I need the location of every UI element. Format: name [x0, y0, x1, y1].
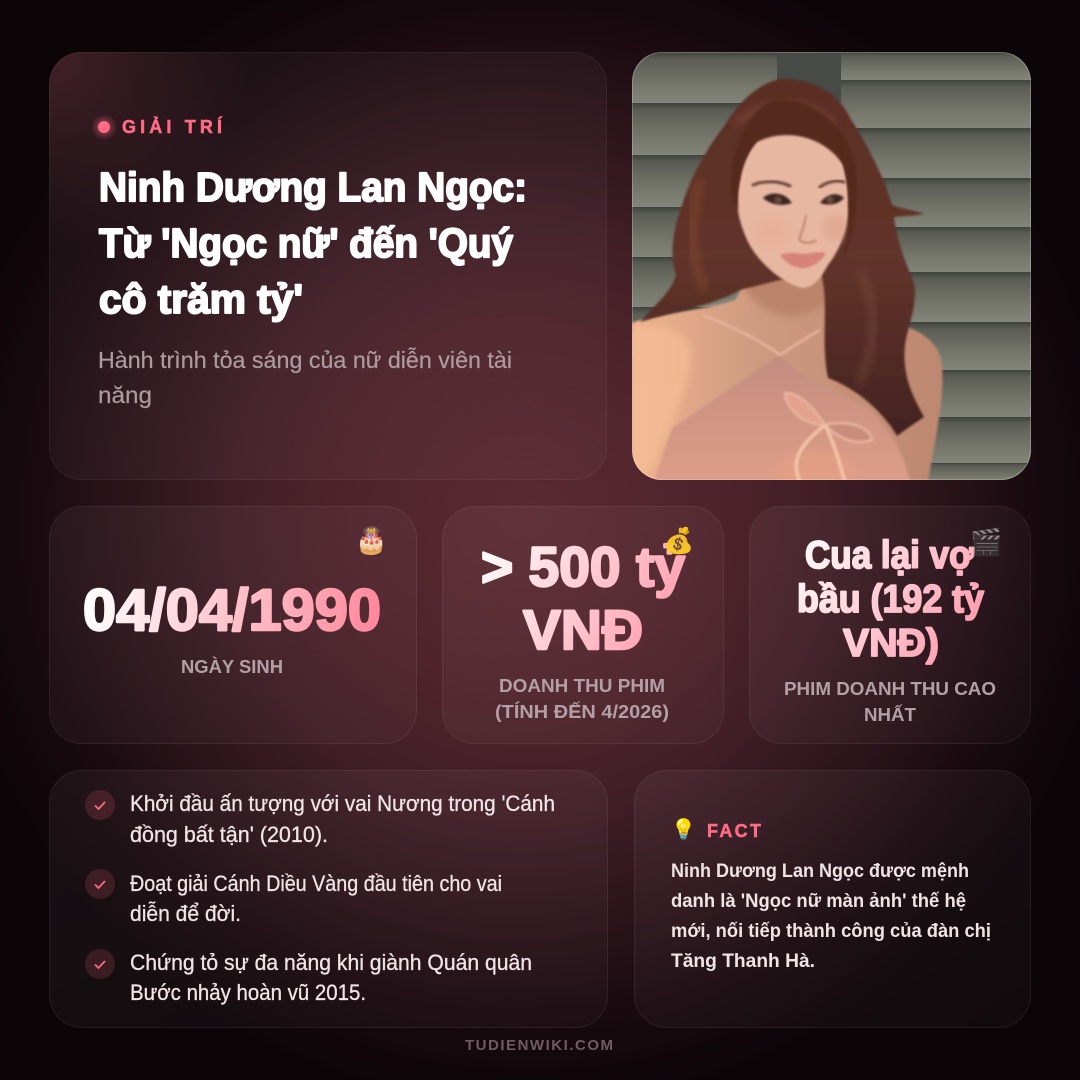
- label: box office: [495, 676, 669, 722]
- icon: light bulb: 💡: [671, 817, 696, 841]
- fact text: Tăng Thanh Hà.: [671, 951, 815, 972]
- list item 3: Chứng tỏ sự đa năng khi giành Quán quân: [130, 950, 532, 975]
- value: box office: > 500 tỷ: [481, 535, 685, 598]
- fact text: mới, nối tiếp thành công của đàn chị: [671, 921, 991, 942]
- fact heading: FACT: [707, 821, 761, 841]
- title: Từ 'Ngọc nữ' đến 'Quý: [99, 220, 513, 266]
- title: cô trăm tỷ': [99, 276, 303, 322]
- panel: fact: [634, 770, 1030, 1028]
- hair back: [640, 79, 924, 436]
- label: top film: NHẤT: [864, 704, 916, 725]
- category tag: GIẢI TRÍ: [122, 116, 223, 137]
- label: birth date: NGÀY SINH: [181, 656, 283, 677]
- panel: portrait photo: [632, 52, 1031, 494]
- panel: top film stat: [750, 506, 1030, 744]
- dress: [654, 355, 910, 482]
- eyes: [763, 194, 844, 205]
- value: box office: [481, 535, 685, 661]
- value: box office: VNĐ: [523, 598, 643, 661]
- hair front over forehead: [731, 99, 857, 262]
- eyebrows: [753, 181, 844, 187]
- list item 1: [85, 790, 555, 847]
- icon: clapperboard: 🎬: [970, 527, 1002, 557]
- fact text: [671, 861, 991, 972]
- title: Ninh Dương Lan Ngọc:: [99, 164, 527, 210]
- list item 1: đồng bất tận' (2010).: [130, 822, 328, 847]
- nose: [800, 215, 816, 243]
- label: top film: PHIM DOANH THU CAO: [784, 679, 996, 699]
- label: top film: [784, 679, 996, 725]
- list item 2: Đoạt giải Cánh Diều Vàng đầu tiên cho vai: [130, 871, 502, 896]
- shoulders and neck: [632, 270, 943, 482]
- footer source: TUDIENWIKI.COM: [465, 1037, 613, 1054]
- panel: highlights list: [50, 770, 608, 1028]
- shutter slats: [632, 52, 1031, 483]
- subtitle: [98, 347, 512, 408]
- list item 3: [85, 949, 532, 1005]
- subtitle: Hành trình tỏa sáng của nữ diễn viên tài: [98, 347, 512, 373]
- halter straps and bow: [702, 315, 872, 482]
- value: top film: VNĐ): [843, 622, 939, 665]
- panel: box office stat: [442, 506, 724, 744]
- label: box office: DOANH THU PHIM: [499, 676, 665, 696]
- fact text: danh là 'Ngọc nữ màn ảnh' thế hệ: [671, 891, 966, 912]
- face: [737, 126, 848, 288]
- title: [99, 164, 527, 322]
- fact text: Ninh Dương Lan Ngọc được mệnh: [671, 861, 969, 882]
- label: box office: (TÍNH ĐẾN 4/2026): [495, 701, 669, 722]
- value: birth date: 04/04/1990: [83, 578, 381, 643]
- panel: title: [49, 52, 607, 480]
- value: top film: bầu (192 tỷ: [797, 578, 984, 621]
- subtitle: năng: [98, 382, 152, 408]
- list item 2: [85, 869, 502, 926]
- value: top film: Cua lại vợ: [805, 534, 974, 577]
- list item 1: Khởi đầu ấn tượng với vai Nương trong 'Cánh: [130, 791, 555, 816]
- lips: [780, 252, 826, 268]
- list item 3: Bước nhảy hoàn vũ 2015.: [130, 980, 366, 1005]
- list item 2: diễn để đời.: [130, 901, 241, 926]
- category tag: [91, 114, 223, 140]
- value: top film: [797, 534, 984, 665]
- icon: money bag: 💰: [663, 526, 694, 556]
- panel: birth date stat: [50, 506, 416, 744]
- icon: birthday cake: 🎂: [355, 524, 387, 556]
